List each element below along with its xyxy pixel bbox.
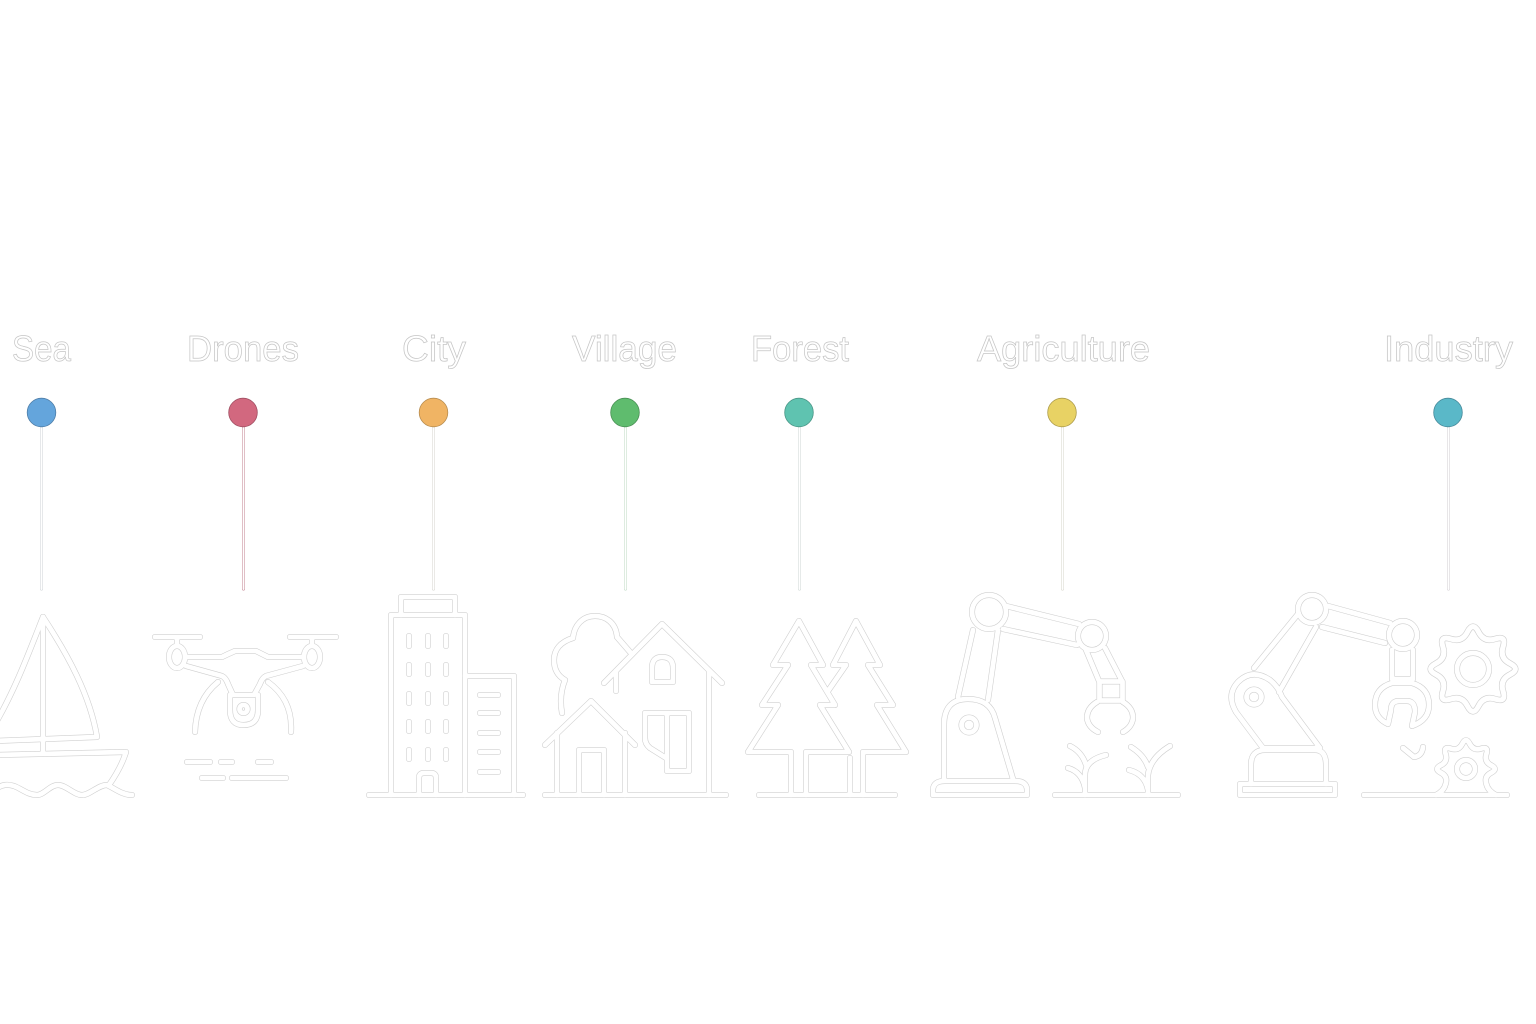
column: City — [369, 328, 523, 795]
label: Sea: Sea — [12, 328, 72, 369]
icon: pine trees — [748, 621, 906, 795]
label: Industry: Industry — [1384, 328, 1513, 369]
label: Drones: Drones — [187, 328, 299, 369]
column: Drones — [155, 328, 336, 778]
icon: agricultural robot arm and plants — [933, 595, 1178, 795]
pin: red marker — [229, 398, 257, 589]
pin: green marker — [611, 398, 639, 589]
pin: teal marker — [785, 398, 813, 589]
icon: village houses and tree — [545, 616, 726, 795]
column: Agriculture — [933, 328, 1178, 795]
label: Agriculture: Agriculture — [977, 328, 1150, 369]
icon: industrial robot arm and gears — [1231, 595, 1515, 795]
pin: cyan marker — [1434, 398, 1462, 589]
label: Forest: Forest — [751, 328, 849, 369]
column: Industry — [1231, 328, 1515, 795]
column: Forest — [748, 328, 906, 795]
icon: city buildings — [369, 597, 523, 795]
icon: drone — [155, 637, 336, 778]
pin: blue marker — [27, 398, 56, 589]
column: Village — [545, 328, 726, 795]
label: Village: Village — [572, 328, 677, 369]
pin: orange marker — [419, 398, 448, 589]
pin: yellow marker — [1048, 398, 1076, 589]
icon: sailboat — [0, 617, 132, 795]
label: City: City — [402, 328, 466, 369]
column: Sea — [0, 328, 132, 795]
